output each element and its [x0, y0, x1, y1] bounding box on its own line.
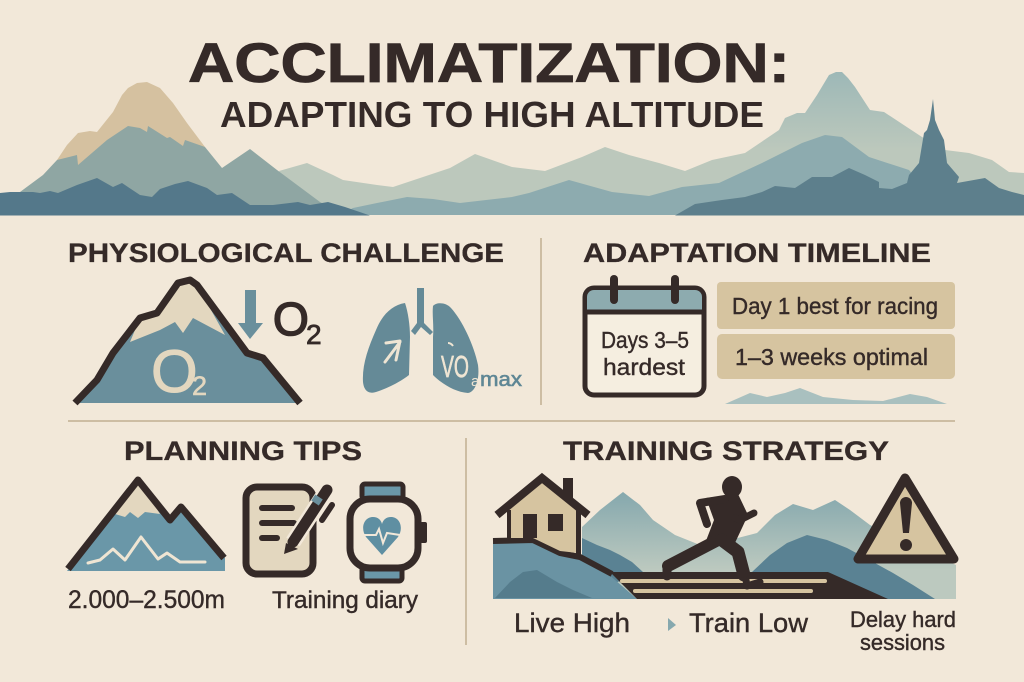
running track: [610, 572, 888, 599]
label: delay hard sessions: [850, 607, 956, 655]
icon: lungs with VO2max: max: [480, 369, 522, 391]
icon: calendar: hardest: [603, 354, 686, 380]
small mountain silhouette: [725, 388, 947, 404]
callout: day 1: Day 1 best for racing: [732, 293, 938, 319]
scene: live high train low: [493, 476, 956, 599]
header mountain landscape: [0, 72, 1024, 216]
distant light mountains: [279, 72, 1024, 215]
label: O2: 2: [306, 319, 322, 350]
dark foreground ridge left: [0, 178, 370, 216]
icon: lungs with VO2max: VO: [441, 349, 469, 384]
icon: training notebook and pen: [246, 487, 332, 574]
icon: mountain with O2: 2: [192, 371, 207, 401]
icon: lungs with VO2max: [363, 288, 522, 393]
heading: training strategy: TRAINING STRATEGY: [563, 436, 889, 466]
label: O2: O: [273, 293, 309, 345]
bush behind hill: [582, 538, 643, 585]
label: train low: Train Low: [689, 608, 809, 638]
dark foreground ridge with stupa right: [675, 99, 1024, 216]
icon: mountain with O2: O: [151, 338, 198, 405]
callout: 1-3 weeks: 1–3 weeks optimal: [735, 344, 928, 370]
panel: adaptation timeline: [583, 238, 955, 404]
label: training diary: Training diary: [272, 587, 418, 614]
grey-teal mountain: [20, 126, 345, 215]
icon: down arrow: [238, 290, 263, 339]
icon: smartwatch with heart rate: [350, 484, 427, 581]
label: O2: [273, 293, 322, 350]
icon: warning triangle: [858, 478, 954, 559]
icon: mountain with O2: [75, 280, 300, 405]
label: live high: Live High: [514, 608, 630, 638]
icon: mountain with route: [67, 478, 225, 571]
subtitle: ADAPTING TO HIGH ALTITUDE: [220, 94, 764, 135]
panel: physiological challenge: [68, 238, 522, 405]
right bushes: [752, 535, 935, 599]
heading: adaptation timeline: ADAPTATION TIMELINE: [583, 238, 931, 268]
icon: calendar: Days 3–5: [601, 327, 689, 353]
mid blue mountains: [340, 135, 930, 215]
callout: day 1: [717, 282, 955, 329]
label: delay hard sessions: Delay hard: [850, 607, 956, 632]
heading: physiological challenge: PHYSIOLOGICAL CHALLENGE: [68, 238, 504, 268]
panel: planning tips: [67, 436, 427, 614]
icon: runner: [667, 476, 760, 586]
title: ACCLIMATIZATION:: [188, 31, 790, 94]
track lanes: [620, 579, 827, 583]
icon: lungs with VO2max: a: [471, 373, 480, 390]
callout: 1-3 weeks: [717, 334, 955, 379]
arrow: to train low: [668, 618, 676, 631]
heading: planning tips: PLANNING TIPS: [124, 436, 362, 466]
icon: calendar: [585, 279, 704, 395]
icon: house: [497, 478, 588, 556]
background mountains: [582, 492, 956, 599]
tan peak: [57, 82, 205, 170]
panel: training strategy: [493, 436, 956, 655]
label: altitude range: 2.000–2.500m: [68, 586, 225, 614]
dark bush on hill: [495, 570, 592, 598]
left hill: [493, 540, 637, 599]
label: delay hard sessions: sessions: [860, 630, 945, 655]
